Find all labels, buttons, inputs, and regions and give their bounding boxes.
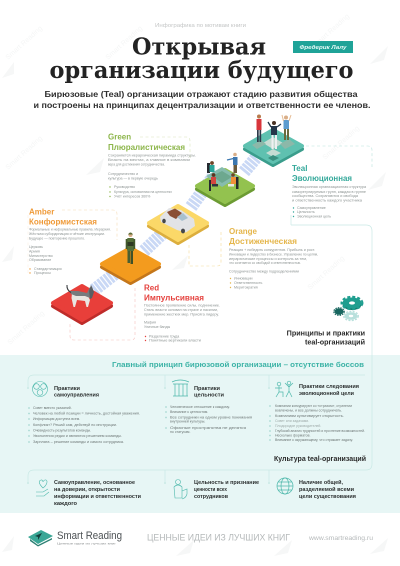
author badge: Фредерик Лалу — [300, 45, 348, 51]
text block: Red: Разделение труда — [149, 334, 179, 338]
text block: Amber: Будущее — повторение прошлого. — [29, 236, 85, 240]
text block: Red: Уличные банды — [144, 325, 171, 329]
subtitle: и построены на принципах децентрализации и ответственности ее членов. — [34, 101, 370, 110]
text: Smart Reading — [5, 25, 44, 61]
text: shared purpose: разделяемой всеми — [299, 486, 354, 493]
wordmark: Smart Reading — [57, 530, 122, 542]
text block: Orange: Инновации и лидерство в бизнесе. Управление по целям, — [229, 252, 318, 256]
list: purpose bullets: Плодородие руководителей. — [275, 424, 321, 428]
text block: Red: Постоянное проявление силы, подчинение. — [144, 304, 220, 308]
list: self-management bullets: Совет вместо указаний. — [33, 406, 72, 410]
icon: two figures — [275, 381, 293, 397]
platform: orange — [102, 248, 159, 283]
text block: Green: вера для достижения сотрудничества. — [108, 162, 165, 166]
footer website: www.smartreading.ru — [308, 536, 373, 542]
text block: Orange: Orange — [229, 227, 258, 236]
text block: Orange: Реакция + победить конкурентов. Прибыль и рост. — [229, 248, 315, 252]
text block: Orange: Меритократия — [234, 286, 258, 290]
text block: Red: Мафия — [144, 320, 156, 324]
text block: Red: Стиль власти основан на страхе и насилии, — [144, 308, 218, 312]
list: wholeness bullets: Все сотрудники на одном уровне понимания — [170, 416, 252, 420]
subtitle: Бирюзовые (Teal) организации отражают стадию развития общества — [44, 90, 358, 99]
text block: Amber: Процессы — [34, 271, 51, 275]
text block: Teal: Эволюционная — [292, 174, 352, 183]
list: purpose bullets — [269, 404, 365, 442]
column: evolutionary purpose practices — [269, 381, 365, 442]
text block: Teal: и ответственность каждого участника — [292, 198, 362, 202]
platform: teal — [245, 130, 302, 165]
text block: Red — [144, 284, 220, 342]
list: purpose bullets: Компании конкурируют со «страхом», стратегии — [275, 404, 352, 408]
dashed connector outlines — [28, 137, 372, 340]
text block: Amber: Amber — [29, 208, 54, 216]
column: self-management practices — [28, 382, 140, 444]
icon: gears — [334, 297, 362, 320]
text block: Orange: иерархические процессы и контроль за тем, — [229, 257, 307, 261]
icon: dog — [67, 285, 94, 307]
list: purpose bullets: Глубокий анализ трудностей и прочтение возможностей. — [275, 429, 365, 433]
text block: Green: Культура, основанная на ценностях — [114, 190, 172, 194]
text block: Amber: Формальные и неформальные правила. Иерархия. — [29, 228, 111, 232]
text: wholeness: ценности всех — [194, 487, 227, 493]
text: Smart Reading — [307, 255, 346, 291]
text block: Orange: Сотрудничество между подразделениями — [229, 270, 299, 274]
text block: Green: Сотрудничество и — [108, 172, 138, 176]
text block: Orange: что сочетается со свободой и ответственностью. — [229, 261, 301, 265]
text block: Orange — [229, 227, 318, 290]
text: Smart Reading — [7, 310, 46, 346]
text block: Teal: сообщества. Сохраняются и свобода — [292, 194, 358, 198]
list: self-management bullets: Человек на любой позиции = личность, достойная уважения. — [33, 412, 140, 416]
heading: principles and practices: teal-организаций — [305, 338, 365, 346]
text block: Green: Сохраняется иерархическая пирамида структуры. — [108, 154, 196, 158]
text block: Green: культура — в первую очередь — [108, 176, 158, 180]
icon: car — [160, 208, 195, 233]
heading: self-management: самоуправления — [54, 392, 99, 398]
text block: Green: Плюралистическая — [108, 143, 185, 152]
heading: main principle: Главный принцип бирюзовой организации – отсутствие боссов — [112, 360, 364, 369]
text: shared purpose — [299, 479, 356, 500]
list: purpose bullets: Несколько форматов. — [275, 434, 310, 438]
text block: Orange: Ответственность — [234, 281, 263, 285]
heading: evolutionary purpose: эволюционной цели — [299, 390, 355, 397]
icon: globe with people — [277, 478, 293, 494]
icon: hand with heart — [36, 480, 49, 496]
list: self-management bullets: Очевидность результатов команды. — [33, 428, 91, 432]
text block: Teal: Teal — [292, 164, 307, 173]
list: purpose bullets: Совет или задачами. — [275, 419, 309, 423]
text block: Orange: Инновации — [234, 276, 252, 280]
text block: Amber: Министерство — [29, 254, 53, 258]
text block: Green: Учёт интересов 360% — [114, 194, 151, 198]
text block: Teal: Эволюционная организационная структура — [292, 185, 366, 189]
icon: self-management network — [32, 382, 48, 396]
platform: red — [53, 286, 111, 323]
culture item: shared purpose — [277, 478, 356, 500]
heading: self-management — [54, 386, 99, 398]
text: trust: на доверии, открытости — [54, 487, 120, 493]
title: Открывая — [132, 34, 266, 60]
text block: Amber: Жёсткая субординация и чёткие инструкции. — [29, 232, 105, 236]
text: trust — [54, 480, 141, 507]
list: self-management bullets: Увольнения редки и являются решением команды. — [33, 434, 122, 438]
solid teal frame lines — [28, 215, 372, 483]
text block: Orange: Достиженческая — [229, 237, 297, 246]
title — [50, 34, 354, 84]
title: организации будущего — [50, 57, 354, 84]
list: wholeness bullets — [165, 405, 252, 434]
text block: Amber: Стандартизация — [34, 267, 62, 271]
text block: Green: Руководство — [114, 185, 135, 189]
subtitle — [34, 90, 370, 110]
text block: Teal: Эволюционная цель — [297, 214, 331, 218]
heading: wholeness — [194, 386, 225, 398]
text block: Teal: саморегулируемых групп, каждая в группе — [292, 190, 366, 194]
footer slogan: ЦЕННЫЕ ИДЕИ ИЗ ЛУЧШИХ КНИГ — [147, 532, 290, 542]
text: trust: Самоуправление, основанное — [54, 480, 135, 486]
stairs between platforms — [94, 153, 260, 290]
header caption: Инфографика по мотивам книги — [155, 23, 246, 29]
column: wholeness practices — [165, 380, 252, 434]
icon: soldier — [126, 232, 135, 264]
text block: Red: Импульсивная — [144, 294, 204, 302]
text: Smart Reading — [312, 13, 351, 49]
text block: Amber: Церковь — [29, 245, 43, 249]
heading: evolutionary purpose: Практики следования — [299, 384, 359, 390]
text block: Amber — [29, 208, 111, 275]
culture item: wholeness — [174, 480, 259, 500]
list: purpose bullets: Компаниям культивирует открытость. — [275, 414, 344, 418]
text block: Teal: Самоуправление — [297, 206, 326, 210]
list: purpose bullets: Внимание к окружающему, что отражает задачу. — [275, 438, 353, 442]
icon: people at a table — [206, 153, 238, 191]
icon: columns — [172, 380, 189, 396]
text block: Teal — [292, 164, 366, 218]
heading: principles and practices: Принципы и практики — [287, 328, 365, 338]
heading: self-management: Практики — [54, 386, 81, 392]
author badge — [293, 41, 353, 53]
panel: teal principles background band — [0, 355, 400, 513]
text block: Green: Власть на местах, а главное в компании — [108, 158, 190, 162]
list: wholeness bullets: по статусам. — [170, 430, 190, 434]
list: wholeness bullets: Человеческое отношение к каждому. — [170, 405, 230, 409]
list: self-management bullets: Зарплата – решение команды и самого сотрудника. — [33, 440, 124, 444]
text: trust: каждого — [54, 501, 78, 507]
culture item: trust — [36, 480, 141, 507]
text block: Green — [108, 132, 196, 198]
text: wholeness: сотрудников — [194, 494, 229, 500]
heading: wholeness: Практики — [194, 386, 221, 392]
list: wholeness bullets: Внимание к ценностям. — [170, 410, 208, 414]
text: Smart Reading — [5, 135, 44, 171]
text: trust: информации и ответственности — [54, 493, 141, 500]
list: wholeness bullets: Офисные пространства не делятся — [170, 426, 246, 430]
text block: Teal: Цельность — [297, 210, 315, 214]
list: self-management bullets — [28, 406, 140, 444]
heading: evolutionary purpose — [299, 384, 359, 397]
tagline: Ценные идеи из лучших книг — [57, 542, 116, 546]
text: Smart Reading — [105, 25, 144, 61]
list: wholeness bullets: внутренней культуры. — [170, 420, 205, 424]
text block: Red: Red — [144, 284, 159, 292]
text block: Amber: Армия — [29, 250, 40, 254]
text: shared purpose: Наличие общей, — [299, 479, 344, 486]
text: shared purpose: цели существования — [299, 494, 356, 500]
icon: team of three people — [256, 114, 291, 149]
icon: book logo — [28, 530, 53, 546]
platform: green — [197, 170, 253, 205]
text: Smart Reading — [322, 125, 361, 161]
icon: person with shield — [174, 480, 187, 499]
text: wholeness: Цельность и признание — [194, 480, 259, 486]
heading: wholeness: цельности — [194, 392, 225, 398]
text block: Red: применение жестких мер. Присяга лидеру. — [144, 312, 219, 316]
heading: teal culture: Культура teal-организаций — [274, 454, 366, 463]
text block: Green: Green — [108, 132, 131, 142]
text block: Red: Понятные вертикали власти — [149, 338, 201, 342]
text block: Amber: Конформистская — [29, 218, 97, 226]
text: wholeness — [194, 480, 259, 500]
text block: Amber: Образование — [29, 258, 51, 262]
list: self-management bullets: Информация доступна всем. — [33, 417, 80, 421]
heading: principles and practices — [287, 328, 365, 346]
footer logo — [28, 530, 122, 546]
list: purpose bullets: вовлечены, и все должны сотрудничать. — [275, 408, 342, 412]
list: self-management bullets: Конфликт? Решай сам, действуй по инструкции. — [33, 423, 117, 427]
platform: yellow — [149, 206, 207, 243]
